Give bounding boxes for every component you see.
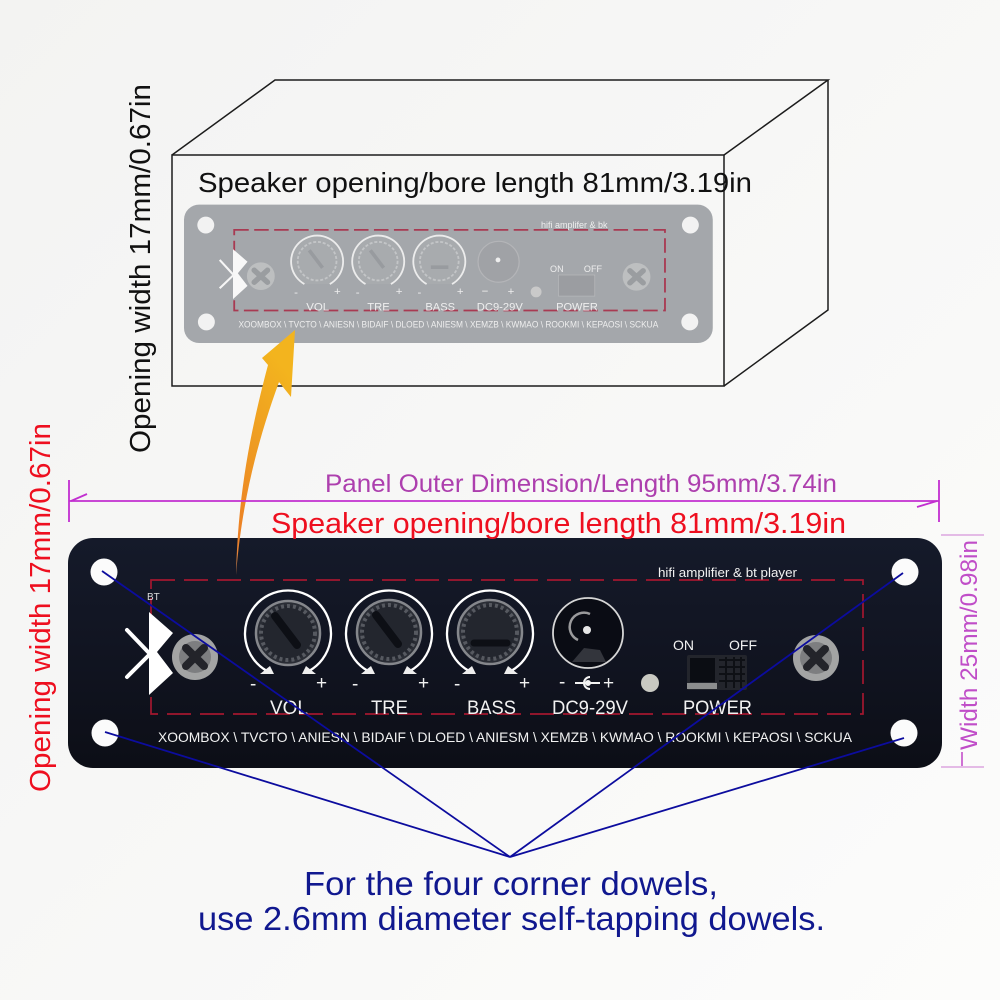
icon: bluetooth logo: BT (147, 592, 160, 603)
knob: TRE (346, 590, 432, 674)
corner holes (90, 558, 918, 746)
small panel: faded panel mounted in box: + (396, 286, 403, 298)
heading: box opening width: Opening width 17mm/0.67in (125, 84, 157, 453)
icon: bluetooth logo (127, 592, 173, 695)
panel labels: - (559, 672, 565, 693)
small panel: faded panel mounted in box: TRE (367, 302, 390, 314)
panel labels: - (352, 674, 358, 695)
panel labels: - (250, 674, 256, 695)
panel labels: VOL (270, 698, 308, 719)
panel labels: ON (673, 637, 694, 653)
DC power jack (553, 598, 623, 668)
callout: dowel instructions: For the four corner dowels, (304, 865, 718, 902)
power switch (687, 655, 747, 690)
small panel: faded panel mounted in box: - (356, 287, 360, 299)
LED indicator (641, 674, 659, 692)
knob: BASS (447, 590, 533, 674)
label: red opening width: Opening width 17mm/0.67in (25, 423, 57, 792)
panel labels: BASS (467, 698, 516, 719)
small panel: faded panel mounted in box: OFF (584, 264, 603, 274)
small panel: faded panel mounted in box: hifi amplifer & bk (541, 220, 608, 231)
panel labels: TRE (371, 698, 408, 719)
panel labels: OFF (729, 637, 757, 653)
heading: box opening length: Speaker opening/bore length 81mm/3.19in (198, 167, 752, 198)
panel labels (158, 565, 853, 745)
knob: VOL (245, 590, 331, 674)
red dashed opening outline (151, 580, 863, 714)
panel labels: + (603, 673, 614, 694)
panel labels: + (418, 673, 429, 694)
small panel: faded panel mounted in box: DC9-29V (477, 302, 523, 314)
small panel: faded panel mounted in box: POWER (556, 302, 598, 314)
small panel: faded panel mounted in box: - (418, 287, 422, 299)
panel labels: + (316, 673, 327, 694)
small panel: faded panel mounted in box: + (508, 286, 515, 298)
diagram: speaker box outline (172, 80, 828, 386)
small panel: faded panel mounted in box: XOOMBOX \ TVCTO \ ANIESN \ BIDAIF \ DLOED \ ANIESM \ XEMZB \ KWMAO \ ROOKMI \ KEPAOSI \ SCKUA (238, 319, 659, 329)
panel labels: + (519, 673, 530, 694)
right screw (793, 635, 839, 681)
small panel: faded panel mounted in box: ON (550, 264, 564, 274)
callout: dowel instructions (198, 865, 825, 937)
small panel: faded panel mounted in box: - (294, 287, 298, 299)
leader lines: dowel callouts (102, 571, 904, 857)
small panel: faded panel mounted in box: + (334, 286, 341, 298)
callout: dowel instructions: use 2.6mm diameter self-tapping dowels. (198, 900, 825, 937)
small panel: faded panel mounted in box: BASS (425, 302, 455, 314)
dimension: panel outer length (69, 480, 939, 522)
left screw (172, 634, 218, 680)
small panel: faded panel mounted in box: + (457, 286, 464, 298)
label: red opening length: Speaker opening/bore length 81mm/3.19in (271, 508, 846, 540)
arrow: orange curved arrow to box (236, 330, 295, 575)
panel labels: POWER (683, 698, 752, 719)
main panel: black amplifier panel (68, 538, 942, 768)
panel labels: - (454, 674, 460, 695)
label: panel width: Width 25mm/0.98in (956, 540, 983, 750)
small panel: faded panel mounted in box: − (482, 286, 489, 298)
panel labels: DC9-29V (552, 698, 628, 719)
small panel: faded panel mounted in box (184, 205, 713, 343)
panel labels: XOOMBOX \ TVCTO \ ANIESN \ BIDAIF \ DLOED \ ANIESM \ XEMZB \ KWMAO \ ROOKMI \ KEPAOSI \ SCKUA (158, 729, 853, 745)
small panel: faded panel mounted in box: VOL (306, 302, 329, 314)
panel labels: hifi amplifier & bt player (658, 565, 798, 580)
label: panel outer length: Panel Outer Dimension/Length 95mm/3.74in (325, 470, 837, 498)
icon: DC polarity symbol (575, 677, 600, 689)
dimension: panel width ticks (941, 535, 984, 767)
